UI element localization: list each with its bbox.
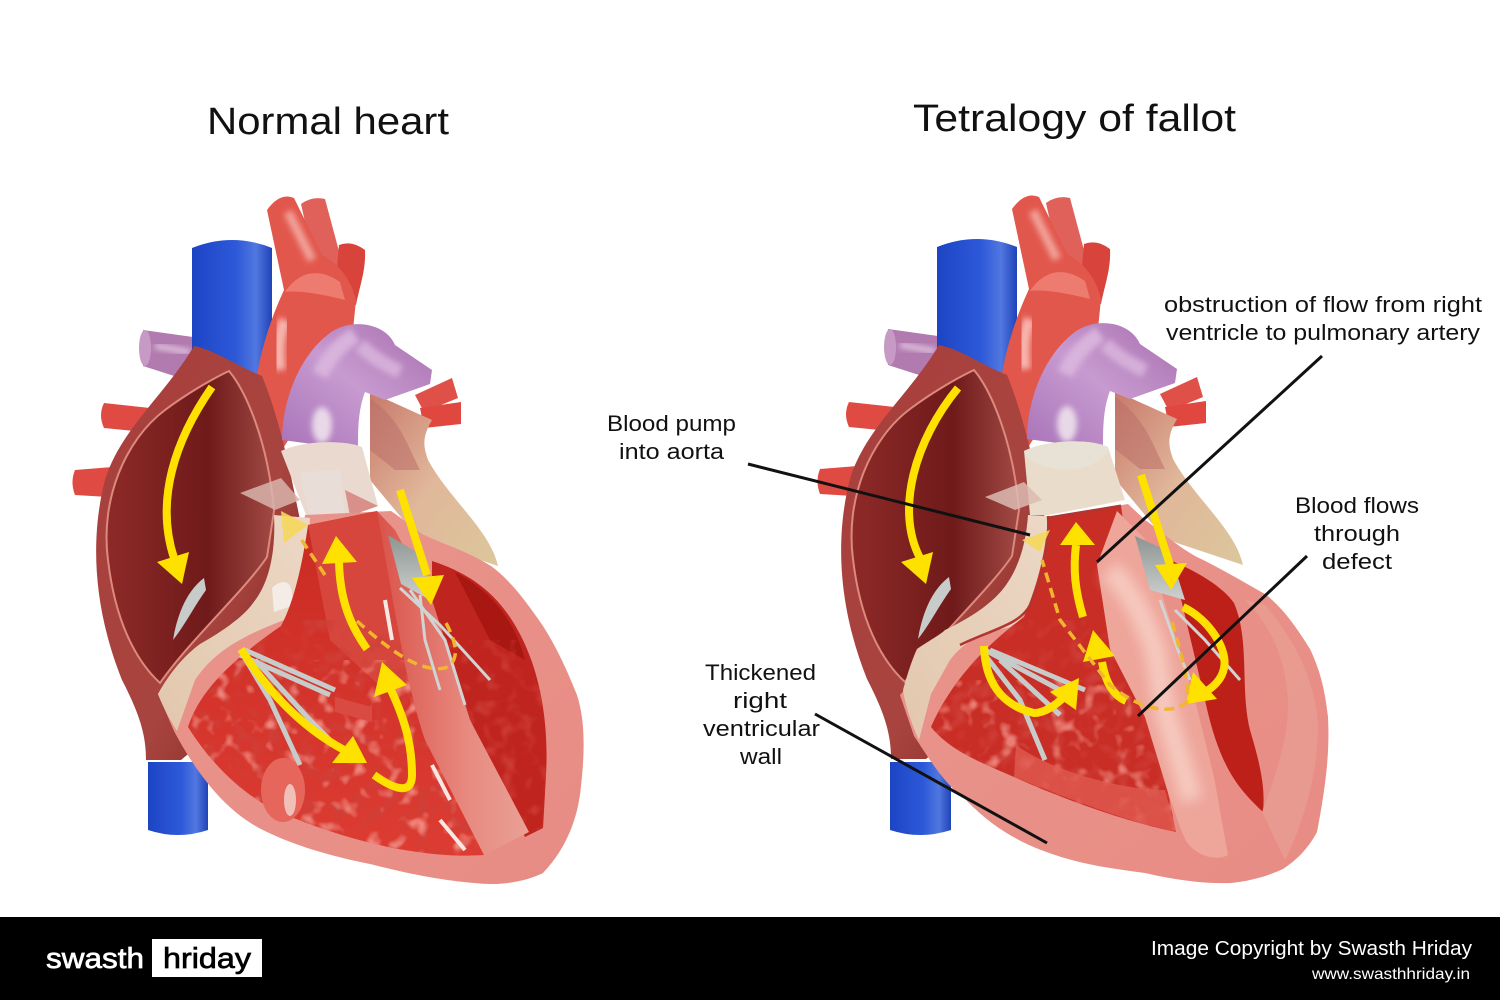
arrow: atrium flow <box>901 388 958 584</box>
ventricle outer wall <box>158 511 584 884</box>
white glints on septum <box>385 600 465 850</box>
label: blood pump into aorta: Blood pump <box>607 411 736 436</box>
label: thickened right ventricular wall: ventricular <box>703 716 820 741</box>
arrow: through defect <box>1083 630 1126 701</box>
arrow: toward aorta <box>1060 522 1095 617</box>
thickened septum <box>1097 511 1228 858</box>
grey chamber and tendons, left <box>388 535 490 705</box>
label: thickened right ventricular wall: wall <box>739 744 782 769</box>
cream atrial wall <box>903 515 1050 740</box>
logo: swasth <box>46 943 144 975</box>
copyright text <box>1151 938 1472 983</box>
label: thickened right ventricular wall: Thickened <box>705 660 816 685</box>
arrow: left atrium flow <box>400 490 444 605</box>
copyright text: www.swasthhriday.in <box>1311 966 1470 983</box>
footer bar <box>0 917 1500 1000</box>
logo: hriday <box>163 943 252 975</box>
left ventricle cavity <box>1172 561 1264 812</box>
label: thickened right ventricular wall <box>703 660 820 769</box>
upper vessels and atrium <box>818 196 1243 759</box>
label: obstruction of flow: ventricle to pulmonary artery <box>1166 320 1480 345</box>
arrow: into right ventricle <box>984 646 1079 713</box>
panel: tetralogy of fallot illustration <box>818 196 1328 883</box>
grey chamber and tendons <box>1135 536 1240 680</box>
leader line: blood pump into aorta <box>748 464 1030 535</box>
chordae <box>985 650 1085 760</box>
arrow: ventricle upward loop <box>374 662 412 788</box>
leader line: thickened wall <box>815 714 1047 843</box>
septum <box>377 511 529 855</box>
cream atrial wall <box>158 515 310 731</box>
label: thickened right ventricular wall: right <box>733 688 787 713</box>
patch edge <box>1048 506 1121 518</box>
leader line: defect <box>1138 556 1307 716</box>
aortic valve <box>985 441 1125 515</box>
label: obstruction of flow: obstruction of flow from right <box>1164 292 1482 317</box>
chordae and papillary muscle <box>240 650 372 822</box>
label: blood flows through defect <box>1295 493 1419 574</box>
arrow: dashed flow <box>1022 530 1188 709</box>
label: blood flows through defect: Blood flows <box>1295 493 1419 518</box>
leader line: obstruction <box>1097 356 1322 562</box>
upper vessels and atrium <box>72 196 498 760</box>
panel: normal heart illustration <box>72 196 584 884</box>
left ventricle cavity <box>432 561 547 837</box>
ventricle outer wall <box>900 504 1328 883</box>
copyright text: Image Copyright by Swasth Hriday <box>1151 938 1472 960</box>
arrow: left ventricle loop <box>1183 607 1225 704</box>
vessel: inferior vena cava <box>148 762 208 835</box>
thick papillary band <box>1245 600 1318 860</box>
title: normal heart: Normal heart <box>207 101 449 143</box>
label: obstruction of flow <box>1164 292 1482 345</box>
title: tetralogy of fallot: Tetralogy of fallot <box>913 98 1236 140</box>
arrow: dashed left heart flow <box>281 511 455 669</box>
vessel: inferior vena cava <box>890 762 951 835</box>
logo <box>46 939 262 977</box>
label: blood flows through defect: defect <box>1322 549 1392 574</box>
right ventricle cavity <box>925 506 1185 832</box>
right ventricle cavity <box>180 511 484 860</box>
label: blood pump into aorta <box>607 411 736 464</box>
white patch on wall <box>272 582 292 612</box>
arrow: left atrium flow <box>1141 475 1187 590</box>
arrow: atrium flow <box>157 387 212 584</box>
aortic valve <box>240 442 378 520</box>
label: blood pump into aorta: into aorta <box>619 439 725 464</box>
arrow: into right ventricle <box>241 649 367 763</box>
arrow: toward pulmonary artery <box>322 536 367 649</box>
label: blood flows through defect: through <box>1314 521 1400 546</box>
